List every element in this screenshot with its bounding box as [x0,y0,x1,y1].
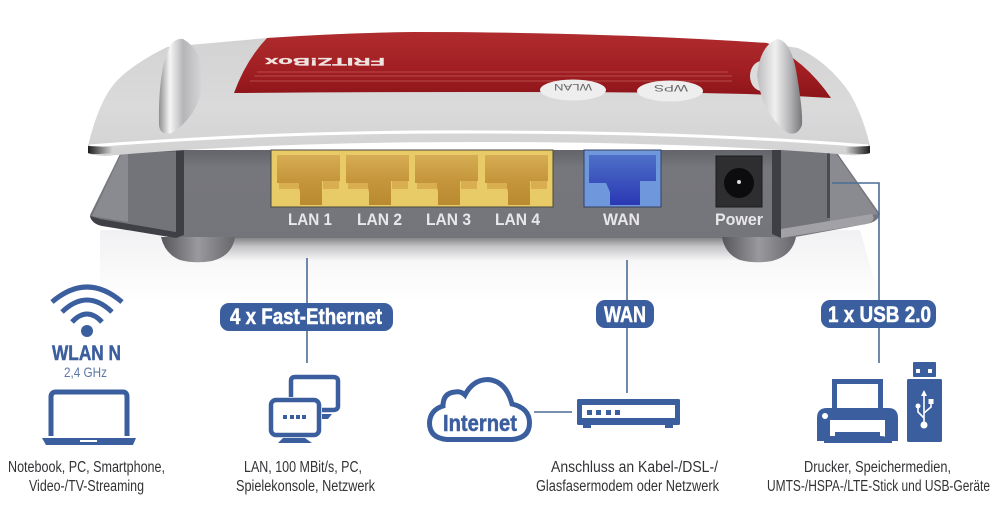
LAN labels: LAN 3 [426,210,471,229]
LAN labels: LAN 2 [357,210,402,229]
pill: 1 x USB 2.0: 1 x USB 2.0 [828,302,931,327]
LAN labels: LAN 1 [288,210,332,229]
pill: WAN: WAN [604,302,646,327]
caption: WAN [536,459,719,495]
left fin [159,39,203,134]
WLAN button: WLAN [554,82,592,92]
background haze behind router [100,230,880,300]
LAN ports [271,150,553,207]
icon: modem [577,399,680,428]
panel ribs [250,72,732,81]
WLAN N heading: WLAN N [52,342,121,365]
WAN label: WAN [603,210,640,229]
right fin [757,39,802,134]
WPS button: WPS [654,83,688,93]
WLAN button [540,80,606,100]
caption: WAN: Glasfasermodem oder Netzwerk [536,478,719,495]
icon: cloud with Internet: Internet [443,410,517,436]
router rear body [90,150,880,238]
icon: USB stick [907,362,942,442]
connector lines [307,183,879,412]
caption: WAN: Anschluss an Kabel-/DSL-/ [551,459,719,476]
caption: WLAN: Video-/TV-Streaming [29,478,144,495]
caption: LAN [236,459,375,495]
WAN port [584,150,661,207]
pill: 4 x Fast-Ethernet: 4 x Fast-Ethernet [230,304,383,329]
WPS button [637,80,703,102]
shell front edge [90,132,868,146]
router feet [161,237,796,262]
caption: USB [767,459,990,495]
router [88,32,880,262]
shell tips [88,146,870,154]
shadow under router [200,236,760,262]
caption: USB: Drucker, Speichermedien, [804,459,951,476]
caption: LAN: Spielekonsole, Netzwerk [236,478,375,495]
red panel [234,32,831,98]
2,4 GHz: 2,4 GHz [64,364,107,380]
icon: laptop [42,392,136,445]
caption: WLAN: Notebook, PC, Smartphone, [8,459,165,476]
icon: cloud with Internet [430,380,530,440]
power socket [716,156,762,207]
caption: WLAN [8,459,165,495]
right fin collar [750,61,774,91]
LAN labels: LAN 4 [495,210,540,229]
LAN labels [288,210,540,229]
FRITZ!Box logo: FRITZ!Box [263,55,385,67]
top shell [88,32,870,156]
power label: Power [715,210,763,229]
icon: monitors [271,377,338,443]
caption: LAN: LAN, 100 MBit/s, PC, [244,459,362,476]
icon: wifi [52,287,122,337]
side panels [90,150,878,238]
icon: printer [817,382,898,443]
